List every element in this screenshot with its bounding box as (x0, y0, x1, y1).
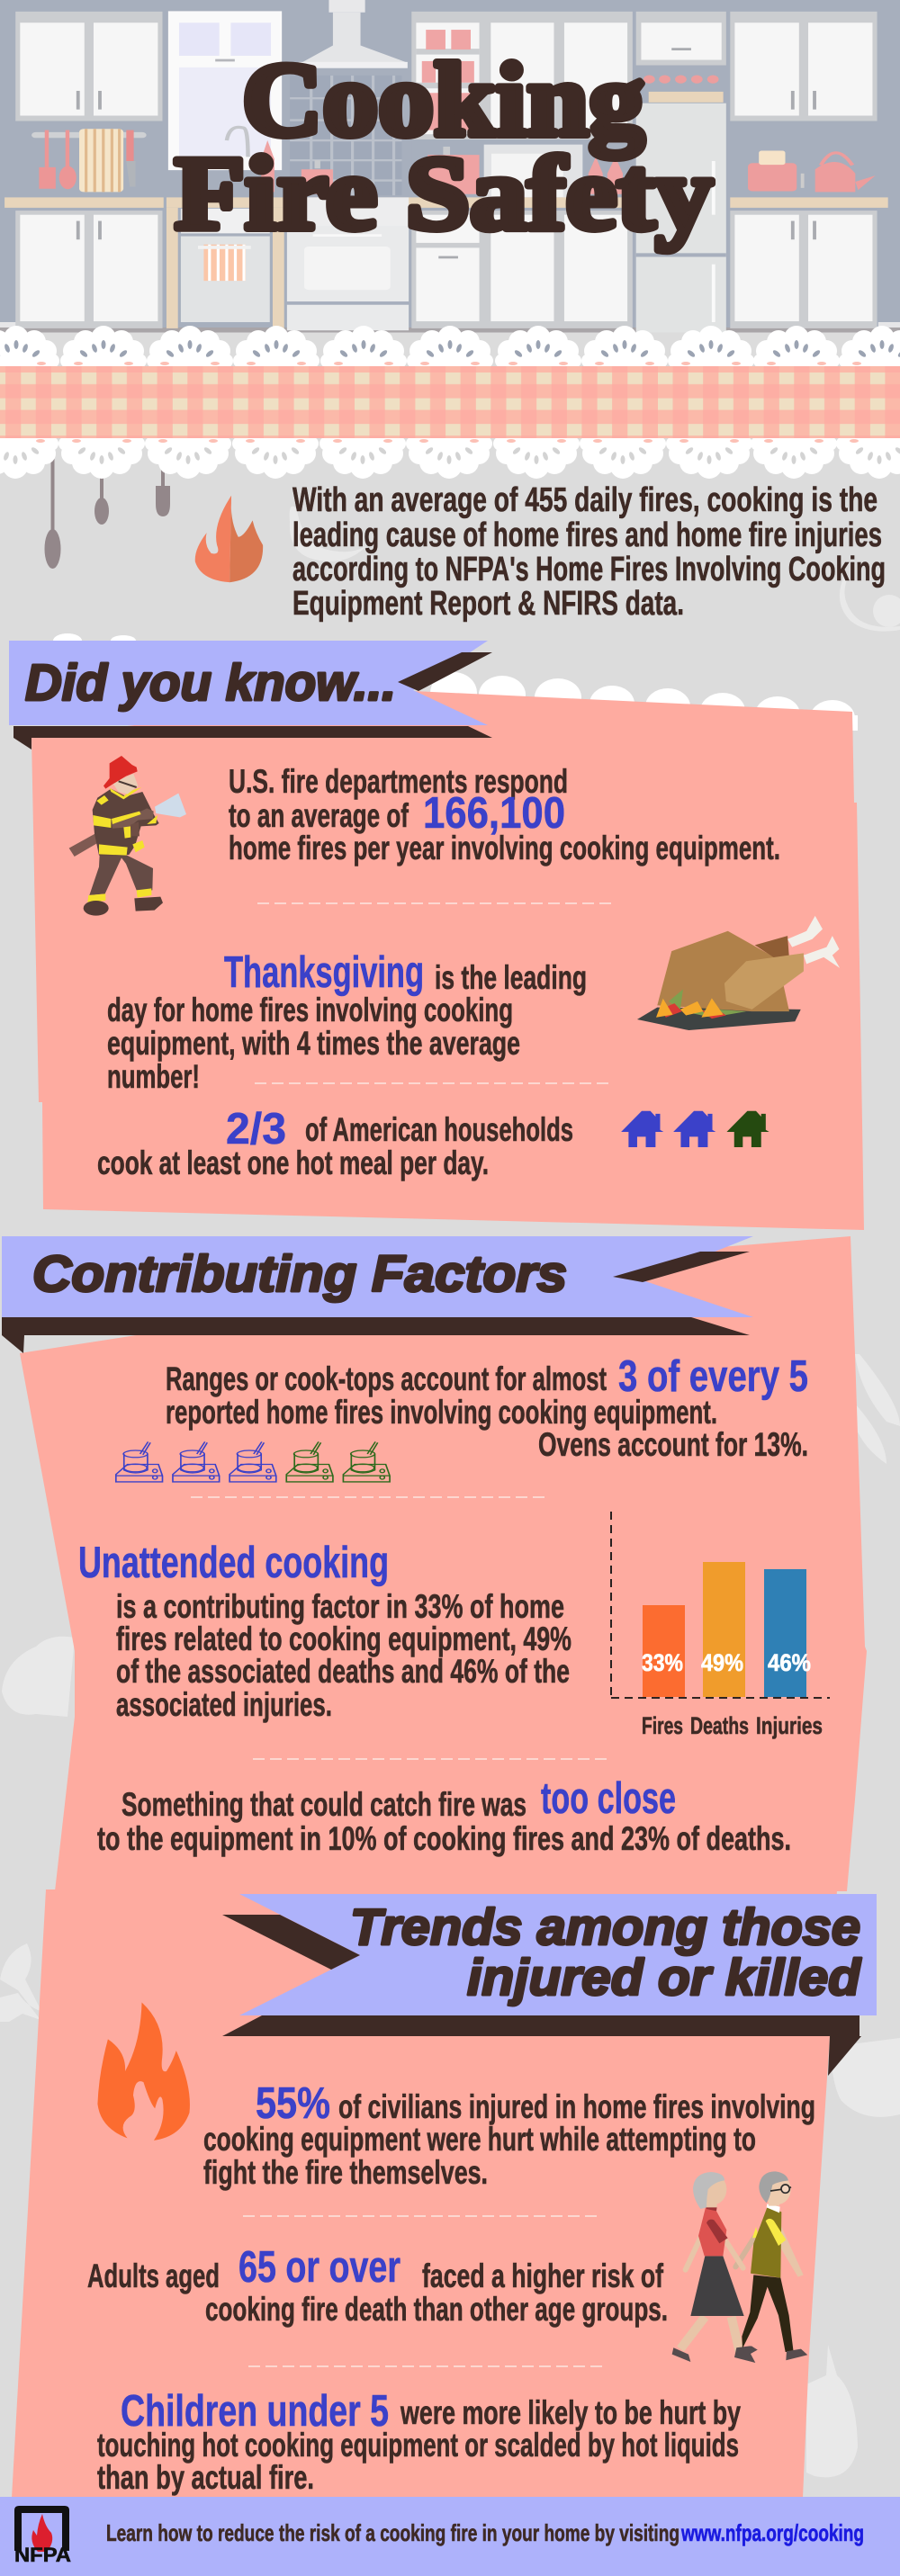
intro text: Equipment Report & NFIRS data. (292, 585, 684, 623)
icon: three houses (621, 1111, 770, 1147)
banner: trends (222, 1894, 877, 2076)
banner: did you know (9, 641, 492, 749)
text: ranges: Ranges or cook-tops account for almost (166, 1360, 607, 1397)
hanging utensils (45, 438, 170, 569)
title: Cooking (242, 42, 644, 158)
text: thanksgiving: is the leading (435, 959, 587, 996)
faint background food shapes (0, 507, 900, 2477)
text: unattended cooking (78, 1539, 572, 1723)
text: unattended cooking: associated injuries. (116, 1686, 332, 1723)
lace behind panel 1 (53, 633, 858, 736)
icon row: five stove pots (116, 1441, 390, 1482)
banner: did you know: Did you know... (25, 654, 396, 712)
text: thanksgiving: Thanksgiving (224, 948, 424, 997)
title (175, 42, 713, 252)
footer text: Learn how to reduce the risk of a cooking fire in your home by visiting (106, 2519, 680, 2546)
footer bar (0, 2497, 900, 2576)
bar chart: unattended cooking: 46% (768, 1649, 811, 1676)
text: children under 5: Children under 5 (121, 2387, 389, 2436)
text: thanksgiving: number! (107, 1058, 200, 1095)
text: 166,100 responses: U.S. fire departments respond (229, 763, 568, 800)
kitchen illustration (0, 0, 900, 332)
intro text (292, 481, 886, 623)
banner: trends: Trends among those (350, 1898, 860, 1956)
text: 2/3 households: of American households (305, 1111, 573, 1148)
bar chart: unattended cooking: 33% (642, 1649, 683, 1676)
text: unattended cooking: fires related to cooking equipment, 49% (116, 1620, 572, 1657)
banner: contributing factors (2, 1236, 753, 1353)
text: 166,100 responses (229, 763, 780, 866)
text: unattended cooking: is a contributing factor in 33% of home (116, 1588, 564, 1625)
text: 55 percent: 55% (256, 2079, 330, 2128)
text: 65 or over: 65 or over (238, 2243, 400, 2292)
lace trim: top (0, 326, 900, 393)
bar chart: unattended cooking (611, 1512, 830, 1739)
panel: trends background (12, 1889, 837, 2498)
text: 65 or over: cooking fire death than other age groups. (205, 2291, 668, 2328)
text: thanksgiving: day for home fires involving cooking (107, 992, 513, 1028)
flame icon: trends (97, 2003, 190, 2141)
title: Fire Safety (175, 136, 713, 252)
gingham band (0, 366, 900, 438)
text: children under 5 (97, 2387, 741, 2496)
text: ranges (166, 1352, 808, 1463)
text: too close: too close (541, 1774, 676, 1823)
text: 2/3 households: cook at least one hot meal per day. (97, 1144, 489, 1181)
text: unattended cooking: of the associated deaths and 46% of the (116, 1653, 570, 1690)
lace trim: bottom (0, 411, 900, 479)
banner: trends: injured or killed (467, 1949, 861, 2006)
panel: contributing factors (20, 1236, 867, 1891)
NFPA logo: NFPA (14, 2544, 71, 2566)
illustration: elderly couple (672, 2171, 807, 2363)
text: 2/3 households (97, 1105, 573, 1181)
text: 65 or over (87, 2243, 668, 2328)
text: 65 or over: faced a higher risk of (422, 2257, 663, 2294)
text: 55 percent: fight the fire themselves. (203, 2154, 488, 2191)
text: 55 percent (203, 2079, 815, 2191)
text: children under 5: were more likely to be hurt by (400, 2394, 741, 2431)
panel: did you know (32, 691, 864, 1230)
text: 2/3 households: 2/3 (226, 1105, 286, 1153)
flame icon (195, 496, 263, 582)
text: too close: Something that could catch fire was (122, 1786, 526, 1823)
turkey icon (637, 916, 840, 1030)
bar chart: unattended cooking: Deaths (690, 1712, 749, 1739)
text: 65 or over: Adults aged (87, 2257, 220, 2294)
text: thanksgiving: equipment, with 4 times the average (107, 1025, 520, 1062)
bar chart: unattended cooking: Injuries (756, 1712, 823, 1739)
text: 166,100 responses: 166,100 (423, 789, 565, 838)
text: unattended cooking: Unattended cooking (78, 1539, 389, 1587)
text: children under 5: than by actual fire. (97, 2459, 314, 2496)
text: 166,100 responses: to an average of (229, 797, 409, 834)
banner: contributing factors: Contributing Factors (32, 1245, 567, 1303)
bar chart: unattended cooking: Fires (642, 1712, 683, 1739)
firefighter icon (69, 756, 186, 916)
text: ranges: 3 of every 5 (618, 1352, 808, 1401)
bar chart: unattended cooking: 49% (701, 1649, 743, 1676)
text: too close (97, 1774, 791, 1857)
NFPA logo (14, 2506, 71, 2566)
text: thanksgiving (107, 948, 587, 1095)
